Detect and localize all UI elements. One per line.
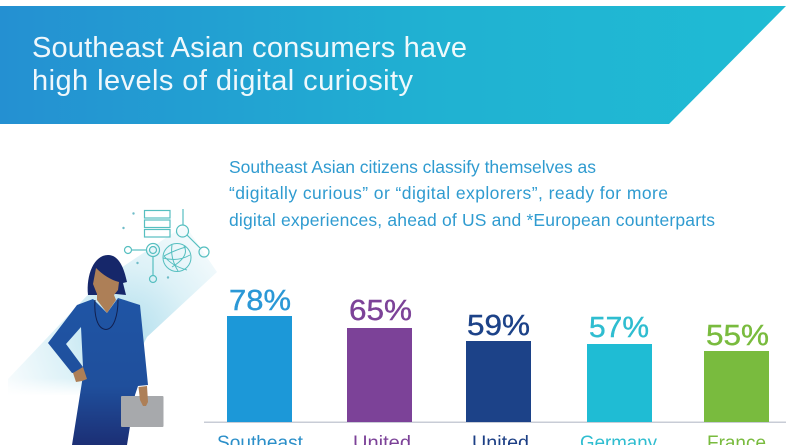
bar: United 65% xyxy=(347,295,412,445)
bar: United 59% xyxy=(466,310,531,445)
diagonal light background band xyxy=(8,225,217,395)
icon: network globe xyxy=(163,244,191,272)
illustration: woman with tablet and digital icons xyxy=(6,209,217,445)
right hand xyxy=(138,386,148,406)
intro text block: “digitally curious” or “digital explorers”, ready for more xyxy=(229,183,668,203)
bar: Germany 57% xyxy=(580,312,657,445)
bar: Germany 57%: 57% xyxy=(589,312,649,344)
bar: France 55% xyxy=(704,320,769,445)
chart baseline xyxy=(204,422,786,423)
intro text block: Southeast Asian citizens classify themselves as xyxy=(229,157,596,177)
bar: United 65%: 65% xyxy=(349,295,412,327)
hair xyxy=(88,255,127,295)
decorative dots xyxy=(122,212,169,279)
band lower fade xyxy=(6,378,141,396)
intro text block: digital experiences, ahead of US and *European counterparts xyxy=(229,210,715,230)
icon: connected nodes xyxy=(124,209,209,282)
banner title xyxy=(32,32,467,97)
dress with arm xyxy=(48,298,148,445)
bar: United 59%: 59% xyxy=(467,310,530,342)
banner title: high levels of digital curiosity xyxy=(32,65,414,97)
header banner xyxy=(0,6,786,124)
tablet xyxy=(121,396,164,427)
bar: France 55%: 55% xyxy=(706,320,769,352)
bar: Southeast Asia 78%: 78% xyxy=(229,285,291,317)
bar chart xyxy=(204,285,786,445)
bar: Southeast Asia 78% xyxy=(217,285,304,445)
banner title: Southeast Asian consumers have xyxy=(32,32,467,64)
neck and face xyxy=(93,268,119,313)
necklace xyxy=(95,300,118,330)
intro text block xyxy=(229,157,715,230)
left hand xyxy=(73,367,87,382)
icon: server stack xyxy=(144,210,170,237)
